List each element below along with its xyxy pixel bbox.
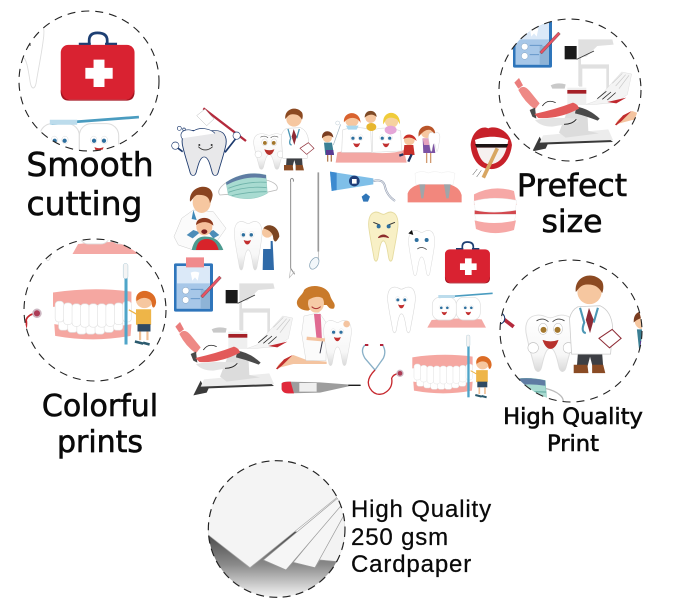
sticker: open mouth with toothbrush (471, 127, 512, 178)
sticker: dental implant (408, 172, 462, 202)
sticker: tooth brushing (172, 108, 246, 176)
zoomed chair view (513, 22, 641, 151)
sticker: dentures with boy brushing (412, 335, 492, 397)
sticker: yellow tooth (369, 212, 398, 261)
heading: high quality print: Print (547, 431, 599, 457)
heading: smooth cutting: cutting (27, 184, 142, 223)
sticker: tooth with girl (234, 221, 279, 270)
sticker: dental mirror (308, 172, 321, 271)
panel: colorful prints circle (23, 238, 167, 382)
heading: prefect size: Prefect (517, 168, 627, 204)
panel: smooth cutting circle (18, 10, 160, 152)
text: paper description: Cardpaper (351, 551, 472, 578)
sticker: dentist with child (174, 187, 226, 250)
sticker: thermometer (282, 382, 361, 393)
sticker: toothpaste tube (330, 172, 395, 202)
sticker: face mask (219, 174, 277, 199)
heading: colorful prints: prints (57, 425, 143, 460)
lower collage stickers (174, 242, 493, 397)
sticker: dental probe (289, 178, 295, 278)
panel: cardpaper circle (208, 461, 345, 597)
text: paper description: 250 gsm (351, 524, 449, 551)
panel: high quality print circle (499, 260, 643, 402)
upper collage stickers (172, 108, 517, 278)
sticker: teeth on gum with toothbrush (427, 293, 493, 328)
sticker: stethoscope (362, 345, 403, 394)
sticker: dental chair (175, 283, 293, 395)
panel: perfect size circle (498, 18, 642, 162)
sticker: decayed tooth (408, 230, 435, 276)
sticker collage (172, 108, 517, 397)
sticker: tooth with doctor (254, 109, 314, 170)
sticker: dentist woman with tooth (276, 286, 351, 369)
zoomed dentures view (25, 240, 156, 346)
sticker: dentures (474, 188, 517, 233)
sticker: kids with big teeth (322, 111, 440, 163)
paper sheets (208, 461, 345, 597)
heading: smooth cutting: Smooth (26, 145, 154, 184)
text: paper description: High Quality (351, 496, 492, 523)
sticker: first aid kit (445, 242, 490, 283)
zoomed doctor view (500, 276, 642, 402)
sticker: clipboard (174, 257, 221, 312)
sticker: smiling tooth (388, 287, 415, 333)
heading: high quality print: High Quality (503, 404, 643, 430)
heading: prefect size: size (541, 204, 603, 240)
heading: colorful prints: Colorful (42, 389, 158, 424)
zoomed kit view (24, 28, 139, 150)
